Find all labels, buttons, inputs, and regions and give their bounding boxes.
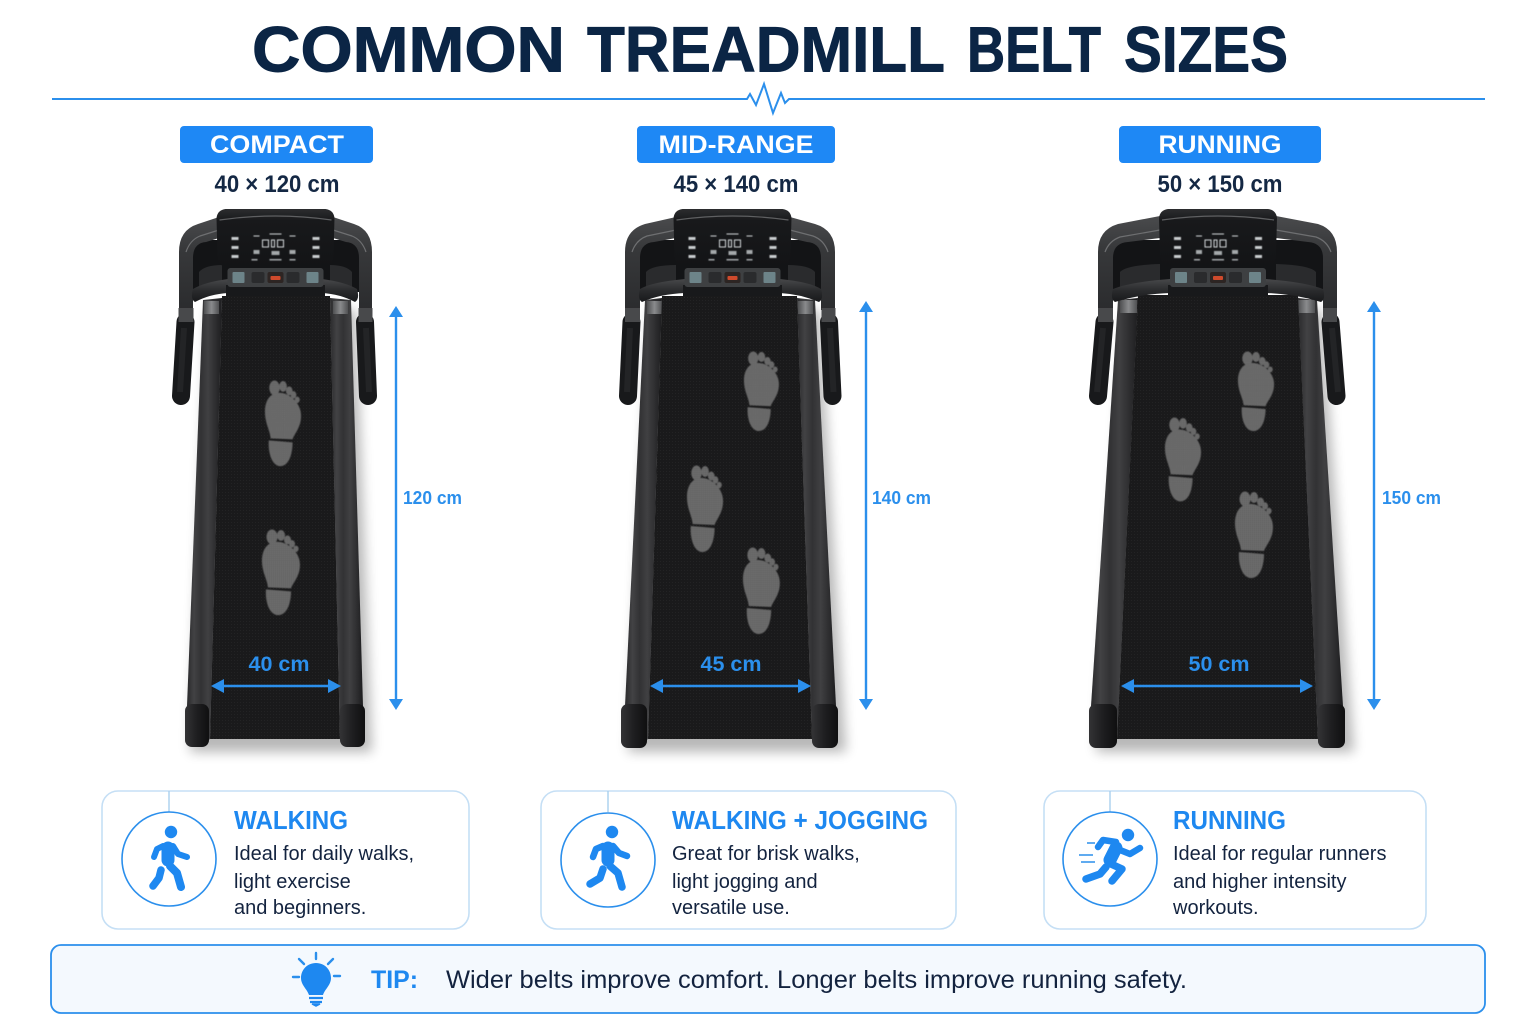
title xyxy=(252,14,1288,86)
heartbeat divider xyxy=(52,84,1485,113)
length arrow: 150 cm: 150 cm xyxy=(1382,488,1441,508)
icon: jogging figure xyxy=(561,813,655,907)
description: walking: and beginners. xyxy=(234,897,366,919)
icon: walking figure xyxy=(122,812,216,906)
icon: light bulb xyxy=(293,953,340,1006)
console surround xyxy=(640,240,821,292)
length arrow: 150 cm xyxy=(1367,301,1441,710)
title: COMMON xyxy=(252,14,565,86)
width arrow: 50 cm xyxy=(1121,653,1313,693)
grips xyxy=(627,308,834,396)
description: walking + jogging: light jogging and xyxy=(672,871,818,893)
length arrow: 120 cm: 120 cm xyxy=(403,488,462,508)
badge: running xyxy=(1119,126,1321,163)
card: running xyxy=(1044,791,1426,929)
tip message: Wider belts improve comfort. Longer belts improve running safety. xyxy=(446,966,1187,994)
treadmill: running xyxy=(1089,209,1354,752)
size: 40 x 120 cm: 40 × 120 cm xyxy=(214,171,340,198)
badge: compact: COMPACT xyxy=(210,131,344,159)
belt xyxy=(210,296,340,739)
card: walking + jogging: WALKING + JOGGING xyxy=(672,805,928,835)
console surround xyxy=(193,240,359,292)
caps xyxy=(1089,704,1345,748)
length arrow: 120 cm xyxy=(389,306,462,710)
column: mid-range xyxy=(621,126,931,752)
badge: mid-range xyxy=(637,126,835,163)
column: compact xyxy=(179,126,462,752)
tip box: TIP: xyxy=(371,966,418,994)
description: walking + jogging: Great for brisk walks, xyxy=(672,843,860,865)
title: SIZES xyxy=(1124,14,1288,86)
title: TREADMILL xyxy=(587,14,945,86)
card: walking + jogging xyxy=(541,791,956,929)
icon: running figure xyxy=(1063,812,1157,906)
footprints xyxy=(687,351,780,634)
badge: compact xyxy=(180,126,373,163)
length arrow: 140 cm xyxy=(859,301,931,710)
belt xyxy=(648,296,812,739)
console surround xyxy=(1113,240,1323,292)
badge: running: RUNNING xyxy=(1158,131,1282,159)
length arrow: 140 cm: 140 cm xyxy=(872,488,931,508)
description: walking: light exercise xyxy=(234,871,351,893)
footprints xyxy=(1165,351,1274,578)
size: 45 x 140 cm: 45 × 140 cm xyxy=(674,171,798,198)
description: running: Ideal for regular runners xyxy=(1173,843,1386,865)
description: walking + jogging: versatile use. xyxy=(672,897,790,919)
width arrow: 50 cm: 50 cm xyxy=(1188,653,1250,676)
caps xyxy=(185,704,365,747)
grips xyxy=(180,308,369,396)
size: 50 x 150 cm: 50 × 150 cm xyxy=(1158,171,1282,198)
treadmill: mid-range xyxy=(621,209,846,752)
card: walking: WALKING xyxy=(234,805,348,835)
card: walking xyxy=(102,791,469,929)
column: running xyxy=(1089,126,1441,752)
description: running: and higher intensity xyxy=(1173,871,1346,893)
treadmill: compact xyxy=(179,209,372,752)
card: running: RUNNING xyxy=(1173,805,1286,835)
grips xyxy=(1097,308,1338,396)
description: walking: Ideal for daily walks, xyxy=(234,843,414,865)
belt xyxy=(1117,295,1318,739)
width arrow: 40 cm xyxy=(211,653,341,693)
badge: mid-range: MID-RANGE xyxy=(658,131,814,159)
width arrow: 45 cm: 45 cm xyxy=(700,653,762,676)
description: running: workouts. xyxy=(1172,897,1259,919)
width arrow: 45 cm xyxy=(650,653,811,693)
tip box xyxy=(51,945,1485,1013)
width arrow: 40 cm: 40 cm xyxy=(248,653,310,676)
footprints xyxy=(262,380,301,615)
title: BELT xyxy=(967,14,1101,86)
caps xyxy=(621,704,838,748)
